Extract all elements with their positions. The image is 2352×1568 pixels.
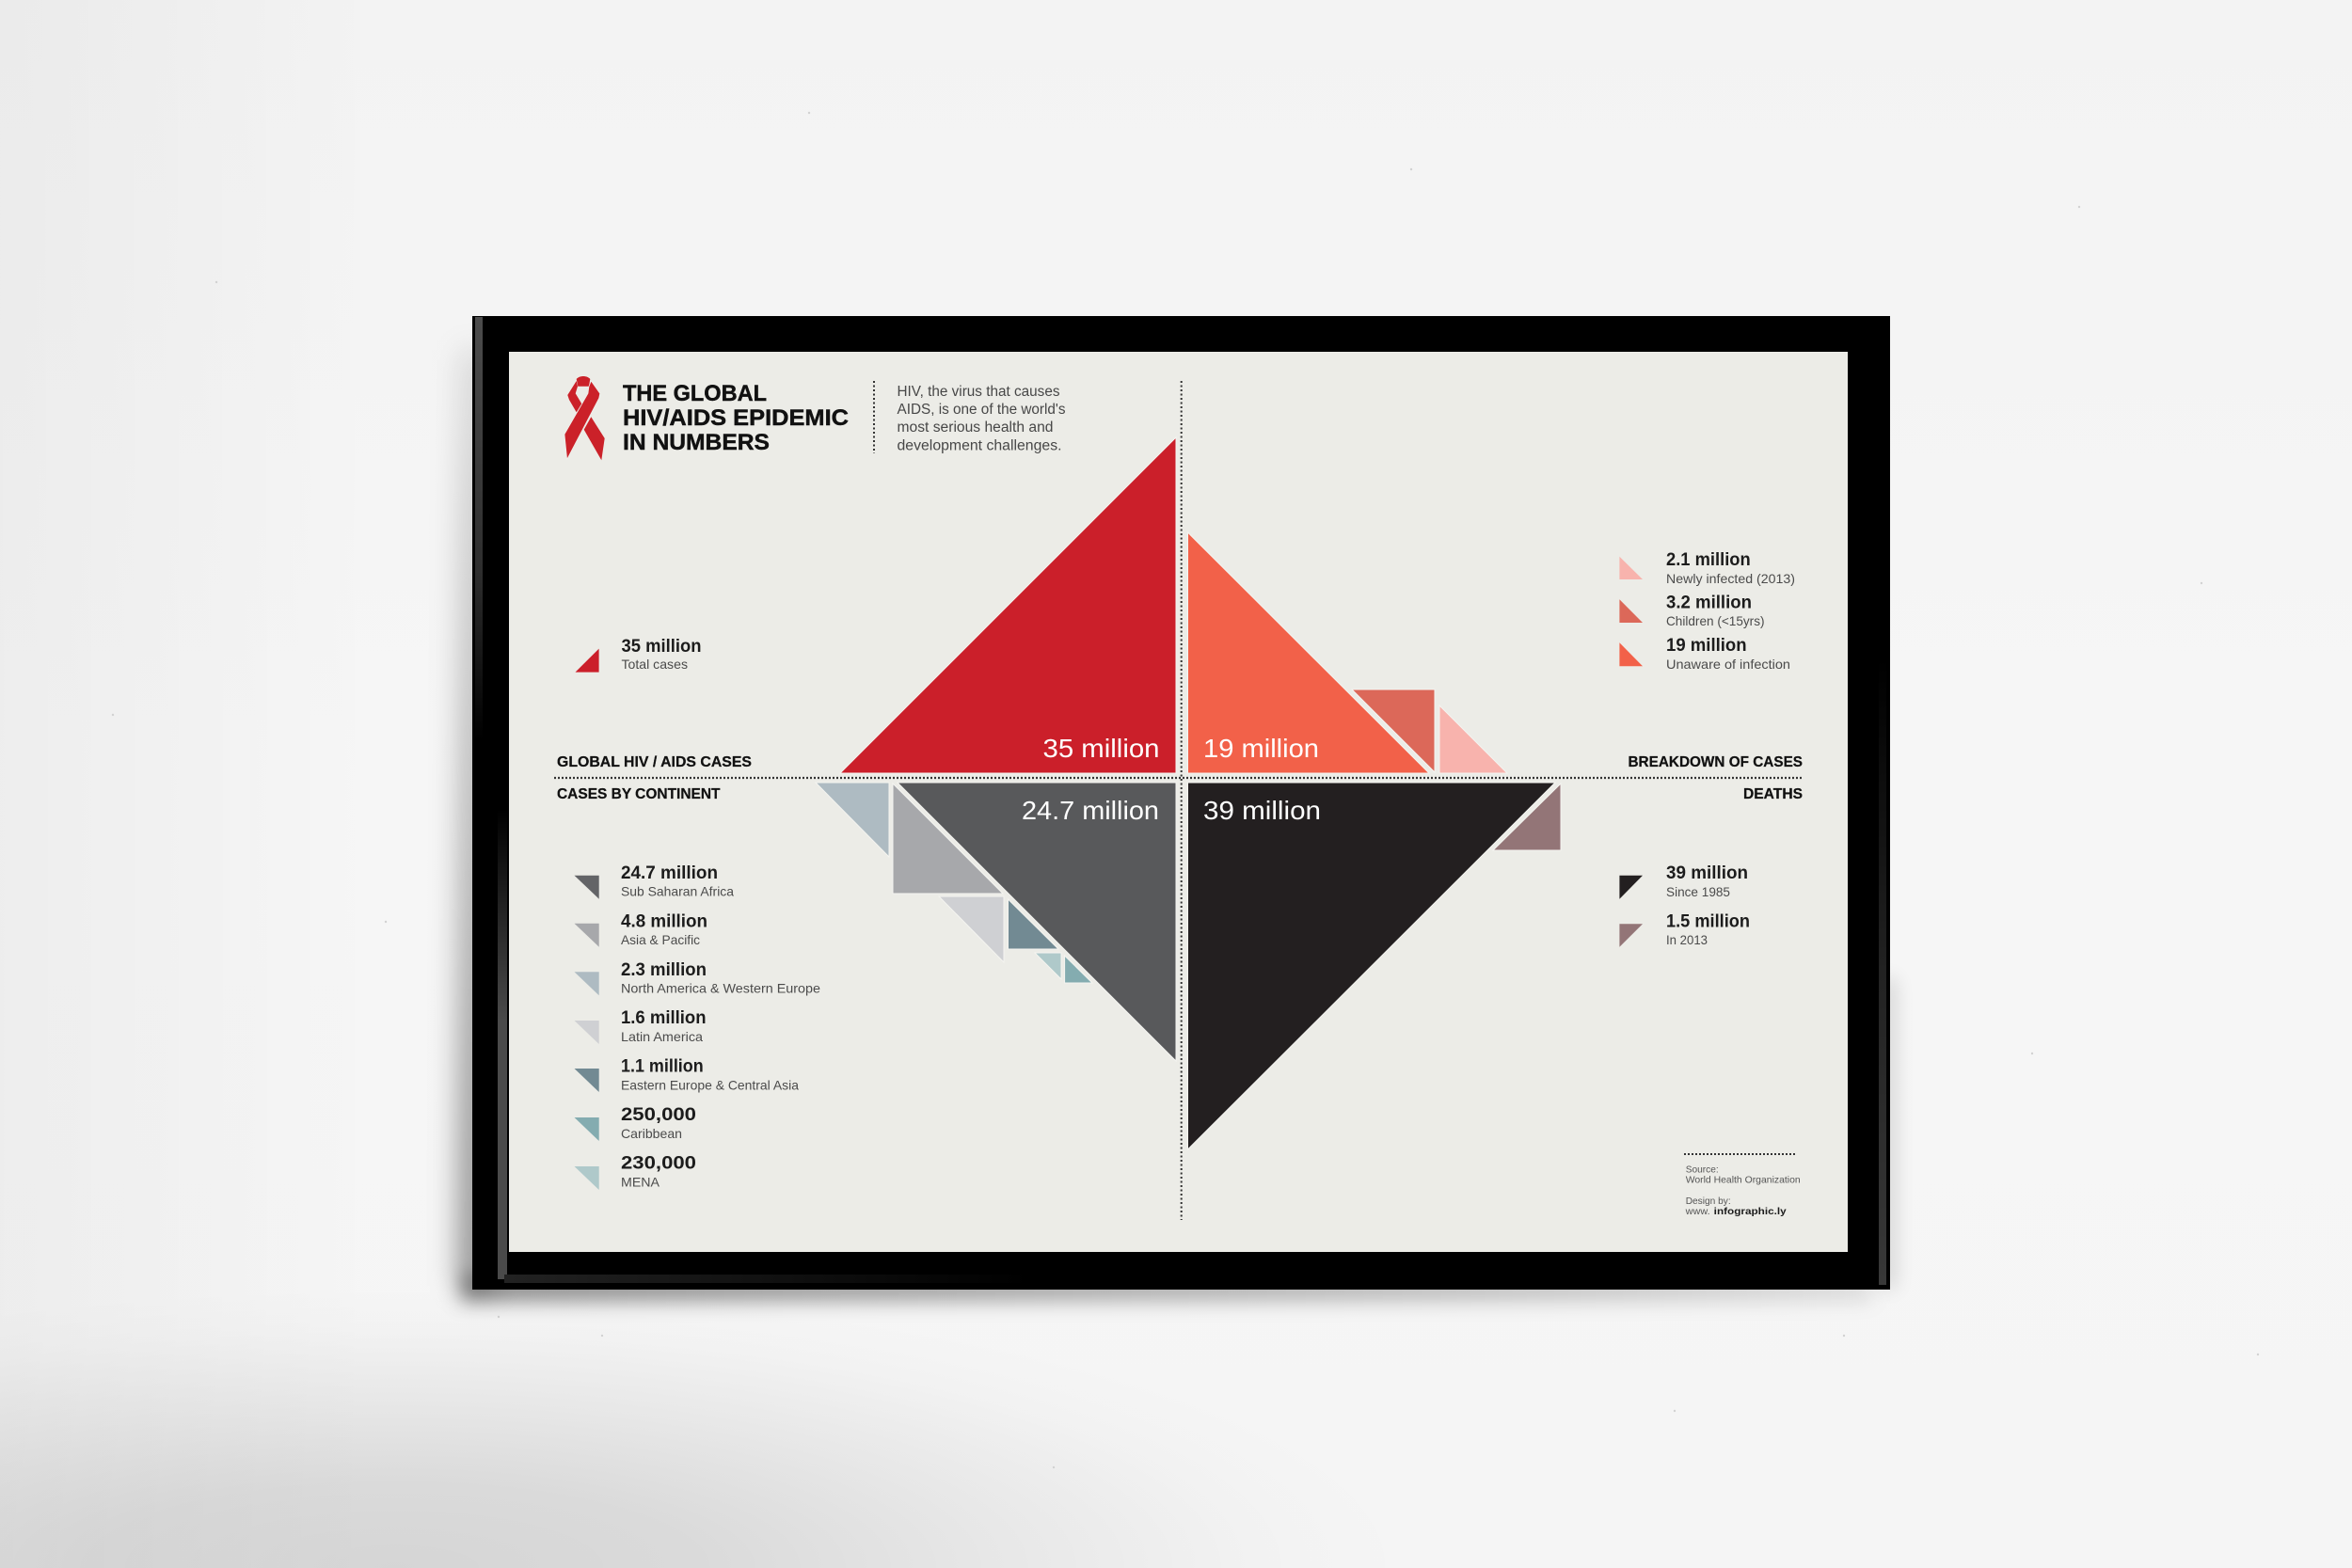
legend item: latin america: 1.6 million bbox=[621, 1008, 706, 1028]
legend: breakdown of cases bbox=[1619, 550, 1795, 672]
source and credits: Source: bbox=[1686, 1164, 1719, 1176]
legend: total cases: Total cases bbox=[621, 657, 688, 672]
legend item: north america and western europe bbox=[574, 960, 820, 996]
legend item: caribbean: 250,000 bbox=[621, 1105, 696, 1125]
legend item: caribbean bbox=[574, 1105, 696, 1141]
chart: breakdown of cases quadrant bbox=[1187, 532, 1507, 773]
triangle: 230,000 mena bbox=[1035, 953, 1061, 979]
legend item: children bbox=[1619, 594, 1765, 628]
poster paper bbox=[509, 352, 1848, 1252]
triangle: 35 million total cases bbox=[840, 437, 1176, 773]
intro text: HIV, the virus that causes bbox=[898, 384, 1060, 400]
heading: global hiv aids cases: GLOBAL HIV / AIDS CASES bbox=[557, 754, 752, 770]
legend item: caribbean: Caribbean bbox=[621, 1126, 682, 1141]
picture frame bbox=[472, 316, 1890, 1290]
icon: red ribbon bbox=[564, 376, 605, 460]
legend item: eastern europe and central asia bbox=[574, 1057, 799, 1093]
legend item: mena bbox=[574, 1153, 696, 1190]
legend item: newly infected: 2.1 million bbox=[1666, 550, 1751, 570]
label: 35 million: 35 million bbox=[1042, 734, 1159, 763]
label: 19 million: 19 million bbox=[1203, 734, 1319, 763]
triangle: 250,000 caribbean bbox=[1065, 956, 1092, 983]
legend item: since 1985 bbox=[1619, 863, 1748, 899]
legend item: unaware of infection: 19 million bbox=[1666, 636, 1747, 656]
legend: cases by continent bbox=[574, 863, 820, 1190]
source and credits: World Health Organization bbox=[1686, 1175, 1801, 1186]
legend item: mena: MENA bbox=[621, 1175, 660, 1190]
intro text: AIDS, is one of the world's bbox=[898, 402, 1066, 418]
legend item: in 2013: 1.5 million bbox=[1666, 912, 1750, 932]
title: THE GLOBAL bbox=[623, 381, 767, 406]
legend item: since 1985: Since 1985 bbox=[1666, 884, 1730, 899]
legend item: eastern europe and central asia: Eastern Europe & Central Asia bbox=[621, 1078, 799, 1093]
legend item: unaware of infection: Unaware of infection bbox=[1666, 657, 1790, 672]
triangle: 1.6 million latin america bbox=[939, 896, 1004, 962]
legend item: newly infected: Newly infected (2013) bbox=[1666, 571, 1795, 586]
label: 39 million: 39 million bbox=[1203, 796, 1321, 825]
triangle: 3.2 million children bbox=[1352, 689, 1435, 772]
triangle: 39 million since 1985 bbox=[1187, 783, 1555, 1149]
title: IN NUMBERS bbox=[623, 430, 770, 455]
legend item: sub saharan africa: 24.7 million bbox=[621, 863, 718, 883]
legend item: latin america bbox=[574, 1008, 706, 1044]
triangle: 24.7 million sub saharan africa bbox=[898, 783, 1176, 1061]
legend item: asia and pacific: Asia & Pacific bbox=[621, 932, 700, 947]
title bbox=[623, 381, 849, 455]
label: 24.7 million: 24.7 million bbox=[1022, 796, 1159, 825]
heading: cases by continent: CASES BY CONTINENT bbox=[557, 786, 721, 802]
legend item: newly infected bbox=[1619, 550, 1795, 586]
legend item: asia and pacific: 4.8 million bbox=[621, 912, 707, 931]
legend: total cases: 35 million bbox=[621, 637, 702, 657]
legend item: children: 3.2 million bbox=[1666, 594, 1752, 613]
legend item: in 2013: In 2013 bbox=[1666, 932, 1708, 947]
heading: breakdown of cases: BREAKDOWN OF CASES bbox=[1628, 754, 1803, 770]
legend item: latin america: Latin America bbox=[621, 1029, 703, 1044]
heading: deaths: DEATHS bbox=[1743, 786, 1803, 802]
triangle: 2.1 million newly infected bbox=[1439, 705, 1507, 773]
chart: deaths quadrant bbox=[1187, 783, 1561, 1149]
legend item: mena: 230,000 bbox=[621, 1153, 696, 1174]
legend item: in 2013 bbox=[1619, 912, 1750, 947]
legend item: children: Children (<15yrs) bbox=[1666, 613, 1765, 628]
source and credits: Design by: bbox=[1686, 1196, 1731, 1207]
legend item: sub saharan africa bbox=[574, 863, 734, 899]
legend item: asia and pacific bbox=[574, 912, 707, 947]
legend item: eastern europe and central asia: 1.1 million bbox=[621, 1057, 704, 1077]
intro text: most serious health and bbox=[898, 420, 1054, 436]
legend: deaths bbox=[1619, 863, 1750, 947]
intro text: development challenges. bbox=[898, 438, 1061, 453]
chart: global cases quadrant bbox=[840, 437, 1176, 773]
source and credits bbox=[1685, 1164, 1801, 1217]
source and credits: www. bbox=[1685, 1206, 1710, 1217]
chart: cases by continent quadrant bbox=[816, 783, 1176, 1061]
intro text bbox=[898, 384, 1066, 453]
triangle: 4.8 million asia and pacific bbox=[893, 784, 1003, 894]
triangle: 19 million unaware bbox=[1187, 532, 1429, 773]
triangle: 2.3 million north america and western europe bbox=[816, 783, 889, 857]
triangle: 1.1 million eastern europe and central asia bbox=[1009, 899, 1058, 949]
source and credits: infographic.ly bbox=[1714, 1206, 1787, 1217]
legend item: sub saharan africa: Sub Saharan Africa bbox=[621, 884, 734, 899]
legend item: north america and western europe: 2.3 million bbox=[621, 960, 707, 980]
legend item: since 1985: 39 million bbox=[1666, 863, 1748, 883]
triangle: 1.5 million in 2013 bbox=[1493, 784, 1561, 850]
legend: total cases bbox=[576, 637, 702, 673]
frame shadow bbox=[461, 350, 1895, 1302]
legend item: unaware of infection bbox=[1619, 636, 1790, 672]
legend item: north america and western europe: North America & Western Europe bbox=[621, 981, 820, 996]
title block bbox=[564, 376, 849, 460]
title: HIV/AIDS EPIDEMIC bbox=[623, 405, 849, 431]
